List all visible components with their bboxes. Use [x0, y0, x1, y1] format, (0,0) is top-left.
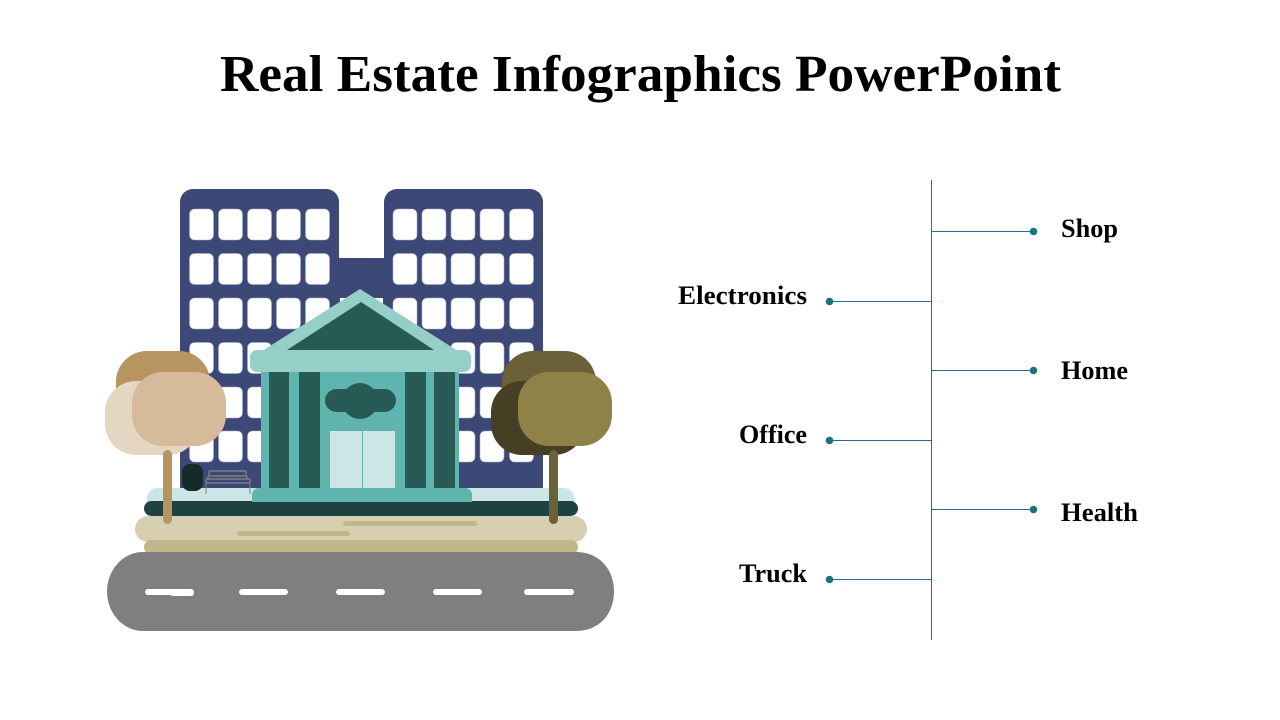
- item: Health: [932, 498, 1139, 527]
- item: Office: Office: [739, 420, 807, 449]
- item: Health: Health: [1061, 498, 1139, 527]
- central vertical line: [931, 180, 932, 640]
- item: Truck: Truck: [739, 559, 808, 588]
- item: Office: [739, 420, 931, 449]
- item: Electronics: [678, 281, 931, 310]
- road: [107, 552, 614, 631]
- illustration: real estate street scene: [105, 189, 614, 631]
- office building: [180, 189, 543, 489]
- item: Home: [932, 356, 1128, 385]
- category timeline: [678, 180, 1139, 640]
- item: Electronics: Electronics: [678, 281, 807, 310]
- item: Home: Home: [1061, 356, 1128, 385]
- bank building: [250, 289, 472, 502]
- item: Truck: [739, 559, 931, 588]
- left tree: [105, 351, 226, 524]
- right tree: [491, 351, 612, 524]
- ground layers: [135, 488, 587, 554]
- bush: [182, 464, 203, 491]
- item: Shop: Shop: [1061, 214, 1118, 243]
- item: Shop: [932, 214, 1118, 243]
- bench: [206, 471, 250, 494]
- title: Real Estate Infographics PowerPoint: [220, 46, 1062, 103]
